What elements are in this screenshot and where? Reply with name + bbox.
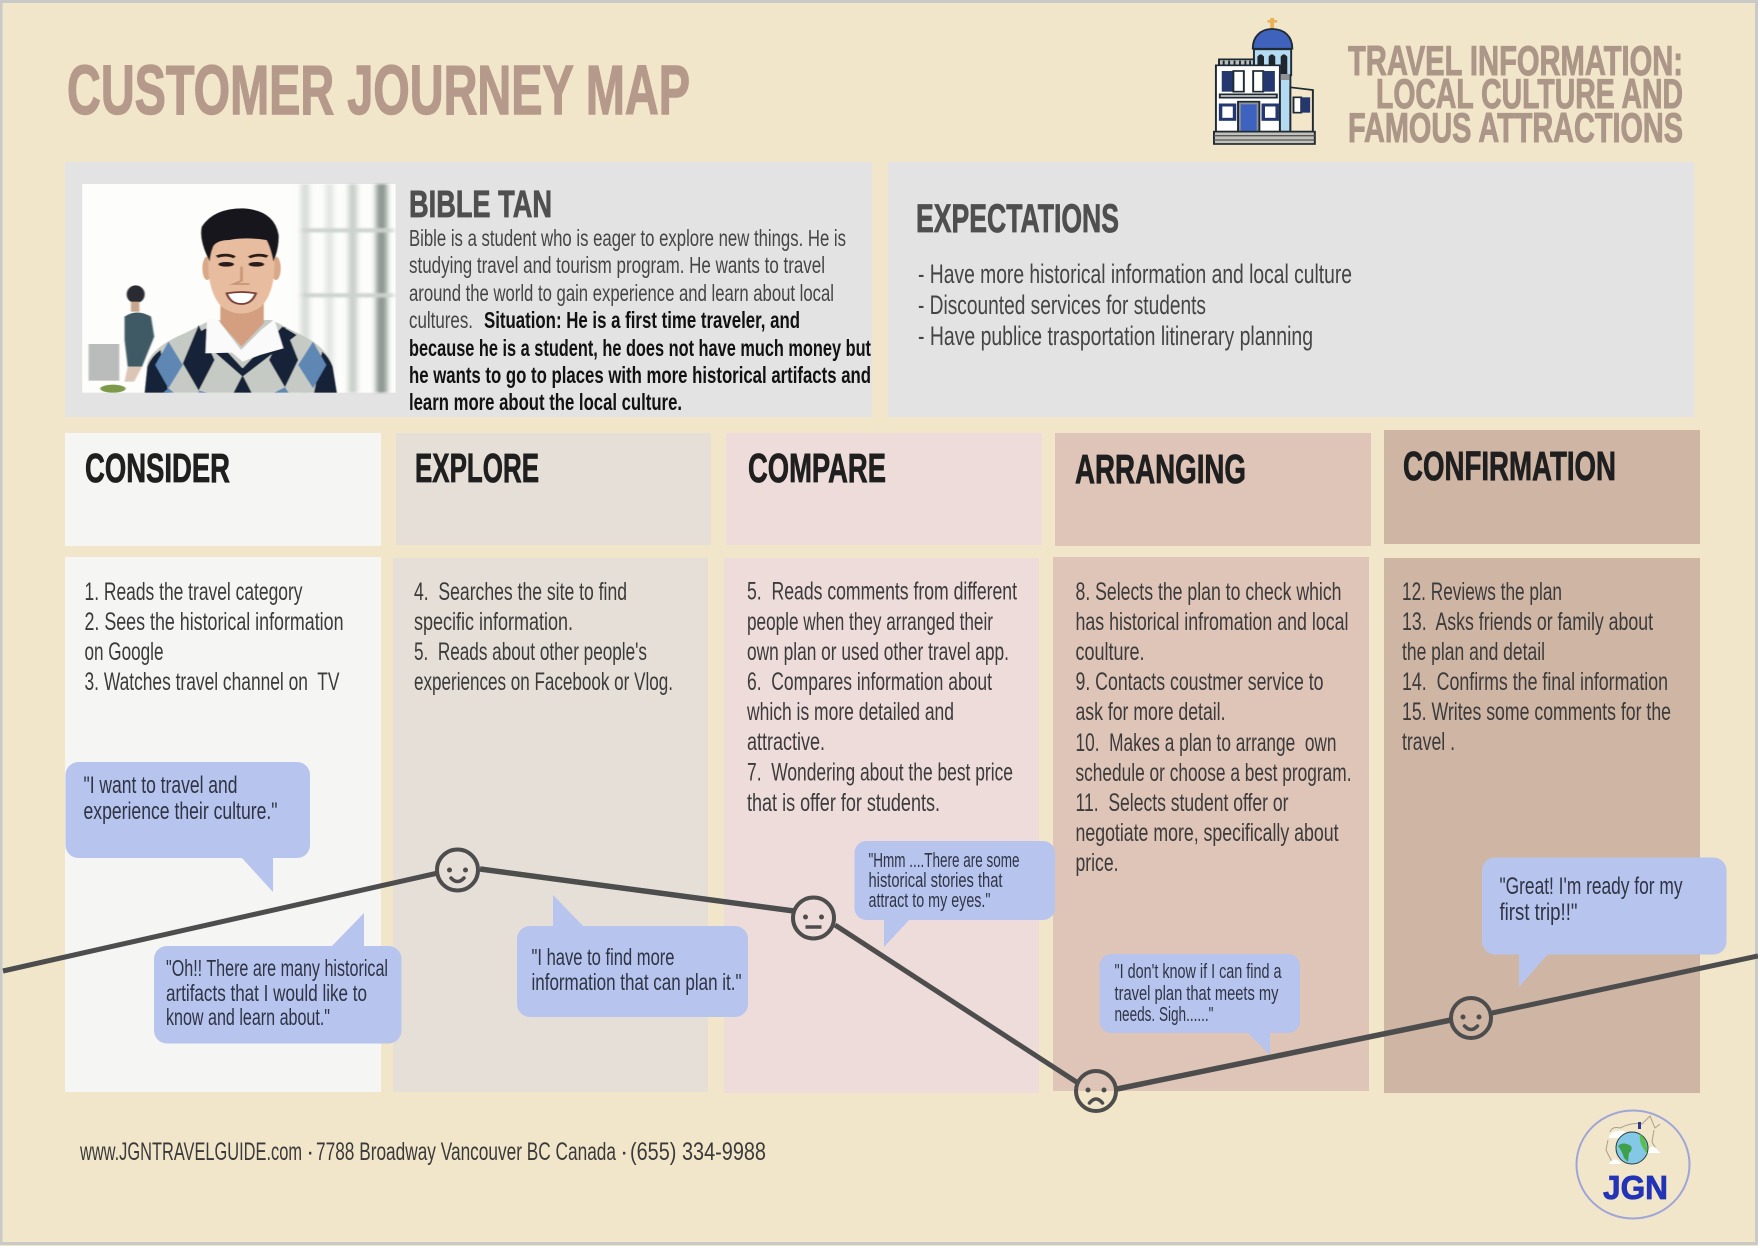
callout: historical artifacts [154, 913, 402, 1044]
column: arranging [1053, 433, 1371, 1091]
column: arranging: schedule or choose a best program. [1076, 759, 1352, 787]
photo: smiling student [82, 184, 396, 393]
icon: happy face, confirmation [1451, 998, 1491, 1038]
column: consider: 1. Reads the travel category [84, 578, 303, 606]
callout: ready for first trip: "Great! I'm ready for my [1500, 873, 1682, 900]
column: consider: 2. Sees the historical information [84, 608, 344, 636]
persona description: because he is a student, he does not have much money but [409, 335, 871, 361]
callout: travel plan doubt: "I don't know if I can find a [1114, 961, 1282, 983]
footer contact line: · [306, 1138, 314, 1166]
panel: expectations [888, 162, 1694, 417]
column: confirmation: the plan and detail [1402, 638, 1545, 666]
callout: want to travel [66, 762, 310, 892]
column: explore: specific information. [414, 608, 573, 636]
persona description: learn more about the local culture. [409, 389, 682, 415]
column: arranging: coulture. [1076, 638, 1144, 666]
footer contact line: · [620, 1138, 628, 1166]
expectations list: - Have publice trasportation litinerary planning [918, 321, 1313, 351]
column: confirmation: travel . [1402, 728, 1455, 756]
column: compare: 5. Reads comments from different [747, 578, 1017, 606]
column: arranging: price. [1076, 849, 1118, 877]
column: compare: COMPARE [748, 445, 886, 491]
column: compare: attractive. [747, 728, 825, 756]
logo: JGN globe: JGN [1603, 1169, 1668, 1206]
column: compare [724, 433, 1042, 1093]
column: arranging: 9. Contacts coustmer service to [1076, 668, 1324, 696]
column: compare: people when they arranged their [747, 608, 993, 636]
column: arranging: ARRANGING [1075, 446, 1246, 492]
expectations heading: EXPECTATIONS [916, 197, 1119, 241]
persona description: Situation: He is a first time traveler, and [484, 307, 800, 333]
column: arranging: 10. Makes a plan to arrange own [1076, 729, 1336, 757]
callout: find more information [517, 895, 748, 1017]
subtitle: travel information [1348, 37, 1683, 151]
callout: ready for first trip [1482, 858, 1726, 987]
column: confirmation: 13. Asks friends or family about [1402, 608, 1653, 636]
column: compare: 6. Compares information about [747, 668, 992, 696]
column: consider: 3. Watches travel channel on TV [84, 668, 340, 696]
persona description [409, 225, 871, 415]
footer contact line: www.JGNTRAVELGUIDE.com [79, 1138, 302, 1166]
chart: emotion journey line [3, 869, 1758, 1089]
column: compare: which is more detailed and [746, 698, 954, 726]
persona description: Bible is a student who is eager to explore new things. He is [409, 225, 846, 251]
callout: travel plan doubt: needs. Sigh......" [1114, 1004, 1214, 1026]
persona name: BIBLE TAN [409, 184, 552, 226]
column: consider: on Google [84, 638, 164, 666]
panel: persona [65, 162, 872, 417]
column: confirmation [1384, 430, 1700, 1093]
callout: historical artifacts: know and learn about." [166, 1004, 330, 1030]
column: confirmation: CONFIRMATION [1403, 443, 1616, 489]
footer contact line: 7788 Broadway Vancouver BC Canada [316, 1138, 616, 1166]
callout: travel plan doubt [1100, 954, 1300, 1055]
column: explore: experiences on Facebook or Vlog. [414, 668, 673, 696]
column: compare: 7. Wondering about the best price [747, 758, 1013, 786]
column: arranging: has historical infromation and local [1076, 608, 1348, 636]
footer contact line: (655) 334-9988 [630, 1138, 766, 1166]
logo: JGN globe [1576, 1110, 1690, 1218]
icon: happy face, explore [437, 850, 478, 890]
column: arranging: 11. Selects student offer or [1076, 789, 1288, 817]
title: CUSTOMER JOURNEY MAP [67, 51, 690, 129]
column: consider [65, 433, 381, 1092]
persona description: around the world to gain experience and learn about local [409, 280, 834, 306]
expectations list [918, 259, 1352, 351]
callout: historical stories [854, 841, 1055, 947]
expectations list: - Have more historical information and local culture [918, 259, 1352, 289]
callout: historical stories: "Hmm ....There are some [868, 850, 1020, 872]
icon: sad face, arranging [1076, 1071, 1116, 1111]
footer contact line [79, 1138, 766, 1166]
column: explore [393, 433, 711, 1092]
callout: find more information: information that can plan it." [532, 969, 742, 995]
column: compare: that is offer for students. [747, 789, 940, 817]
callout: historical artifacts: "Oh!! There are many historical [166, 955, 388, 981]
column: consider: CONSIDER [85, 445, 230, 491]
callout: ready for first trip: first trip!!" [1500, 899, 1578, 926]
callout: want to travel: experience their culture." [84, 798, 278, 825]
persona description: cultures. [409, 307, 473, 333]
callout: historical stories: historical stories that [868, 870, 1003, 892]
column: explore: EXPLORE [415, 445, 539, 491]
callout: historical stories: attract to my eyes." [868, 890, 990, 912]
callout: travel plan doubt: travel plan that meets my [1114, 983, 1278, 1005]
column: confirmation: 12. Reviews the plan [1402, 578, 1562, 606]
icon: neutral face, compare [793, 898, 834, 938]
icon: blue-domed building [1214, 18, 1315, 144]
column: arranging: 8. Selects the plan to check which [1076, 578, 1342, 606]
persona description: he wants to go to places with more historical artifacts and [409, 362, 871, 388]
column: arranging: negotiate more, specifically about [1076, 819, 1339, 847]
column: arranging: ask for more detail. [1076, 698, 1226, 726]
expectations list: - Discounted services for students [918, 290, 1206, 320]
column: explore: 4. Searches the site to find [414, 578, 627, 606]
column: compare: own plan or used other travel app. [747, 638, 1009, 666]
column: explore: 5. Reads about other people's [414, 638, 647, 666]
callout: historical artifacts: artifacts that I would like to [166, 980, 367, 1006]
callout: want to travel: "I want to travel and [84, 772, 238, 799]
persona description: studying travel and tourism program. He wants to travel [409, 252, 825, 278]
callout: find more information: "I have to find more [532, 944, 674, 970]
